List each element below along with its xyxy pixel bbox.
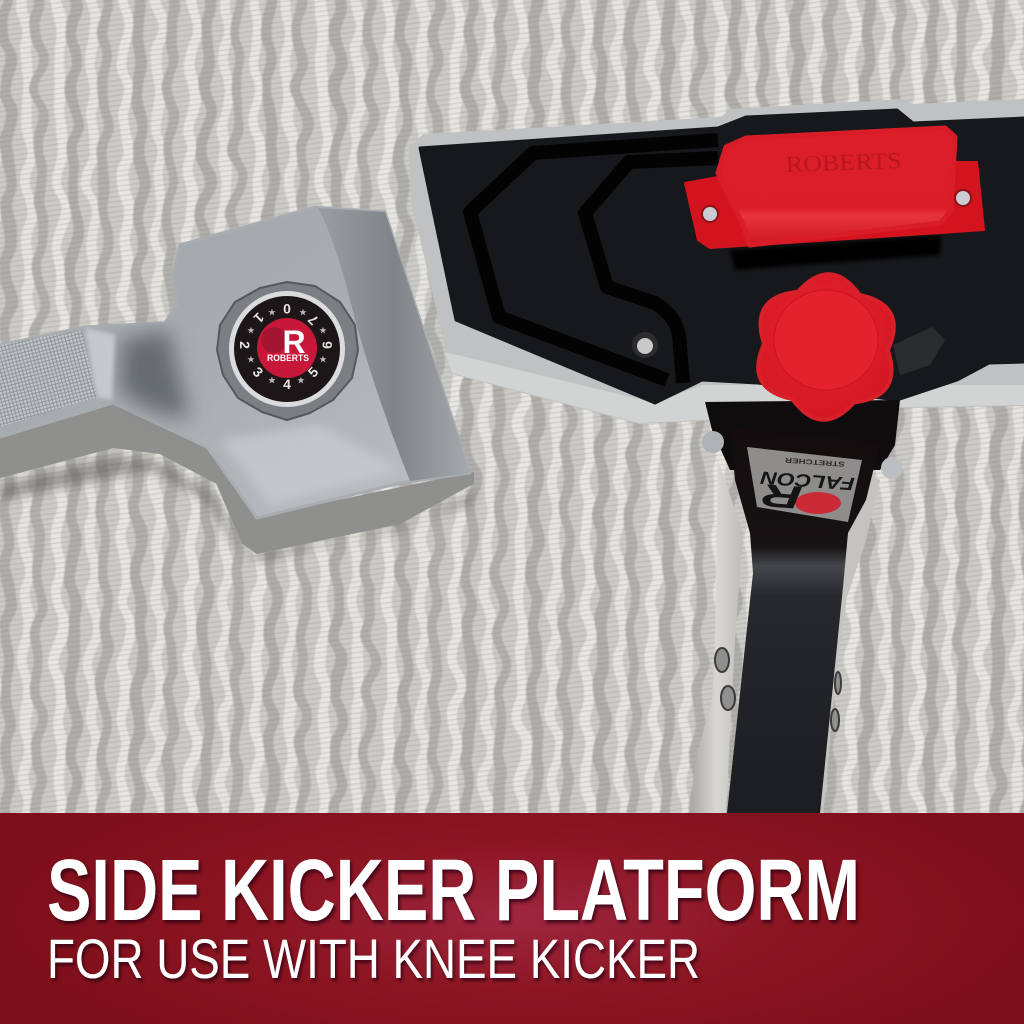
dial brand name: ROBERTS	[267, 353, 309, 363]
kicker shadow on carpet	[0, 455, 478, 562]
leg left silver side	[690, 460, 743, 813]
dial black face	[234, 296, 340, 402]
banner background	[0, 813, 1024, 1024]
block embossed brand: ROBERTS	[785, 148, 902, 177]
platform silver frame	[410, 100, 1024, 423]
leg upper bracket	[705, 400, 900, 470]
platform slot	[893, 327, 945, 375]
dial globe mark	[261, 327, 287, 353]
dial numbers: 7	[304, 311, 321, 328]
knob top disc	[774, 290, 878, 390]
leg left nut	[702, 431, 724, 453]
dial silver ring	[229, 291, 345, 407]
knob lobes	[756, 271, 896, 423]
falcon stretcher leg	[690, 400, 903, 813]
falcon label small text: STRETCHER	[785, 456, 845, 467]
platform black top	[420, 110, 1024, 403]
dial numbers: 1	[250, 310, 267, 327]
dial numbers: 2	[237, 341, 253, 349]
platform lower chrome edge	[445, 352, 1024, 423]
kicker dark reflection	[120, 330, 190, 420]
depth dial knob	[217, 282, 358, 420]
platform recess inner	[585, 158, 718, 383]
dial numbers: 5	[305, 363, 322, 380]
dial numbers	[237, 301, 335, 392]
kicker face highlight	[220, 425, 400, 505]
kicker body side	[0, 403, 473, 553]
dial numbers: ★	[319, 326, 327, 335]
platform recess outer	[470, 140, 718, 380]
dial logo R: R	[282, 324, 306, 360]
dial scalloped outer	[217, 282, 358, 420]
dial numbers: ★	[299, 308, 307, 317]
dial red centre	[257, 318, 317, 378]
dial numbers: 3	[250, 364, 267, 381]
dial numbers: ★	[268, 376, 276, 385]
leg right nut	[881, 457, 903, 479]
falcon label text: FALCON	[759, 467, 855, 494]
dial numbers: ★	[247, 355, 255, 364]
falcon label globe	[795, 492, 841, 514]
leg black arm	[727, 427, 880, 813]
red carpet hook block	[685, 128, 984, 248]
dial numbers: 6	[319, 341, 335, 349]
banner subheading: FOR USE WITH KNEE KICKER	[47, 927, 700, 990]
block left screw	[702, 206, 718, 222]
dial numbers: 0	[283, 301, 291, 317]
kicker neck highlight	[85, 328, 115, 400]
dial numbers: ★	[297, 376, 305, 385]
kicker knurled grip	[0, 330, 97, 427]
falcon label R: R	[761, 477, 803, 516]
side kicker platform plate	[410, 100, 1024, 423]
block body	[718, 128, 955, 245]
platform screw	[632, 332, 658, 358]
leg rivets	[715, 648, 841, 731]
dial numbers: 4	[283, 376, 291, 392]
leg right silver side	[812, 470, 880, 813]
title banner	[0, 813, 1024, 1024]
dial numbers: ★	[247, 326, 255, 335]
red star tensioning knob	[756, 271, 896, 423]
kicker top face	[0, 207, 470, 518]
knee kicker head	[0, 207, 478, 562]
dial numbers: ★	[319, 355, 327, 364]
red block shadow	[730, 235, 941, 270]
block flange	[685, 162, 984, 248]
falcon label plate	[747, 447, 862, 522]
kicker right bevel band	[318, 208, 470, 481]
block right screw	[955, 190, 971, 206]
dial numbers: ★	[268, 308, 276, 317]
